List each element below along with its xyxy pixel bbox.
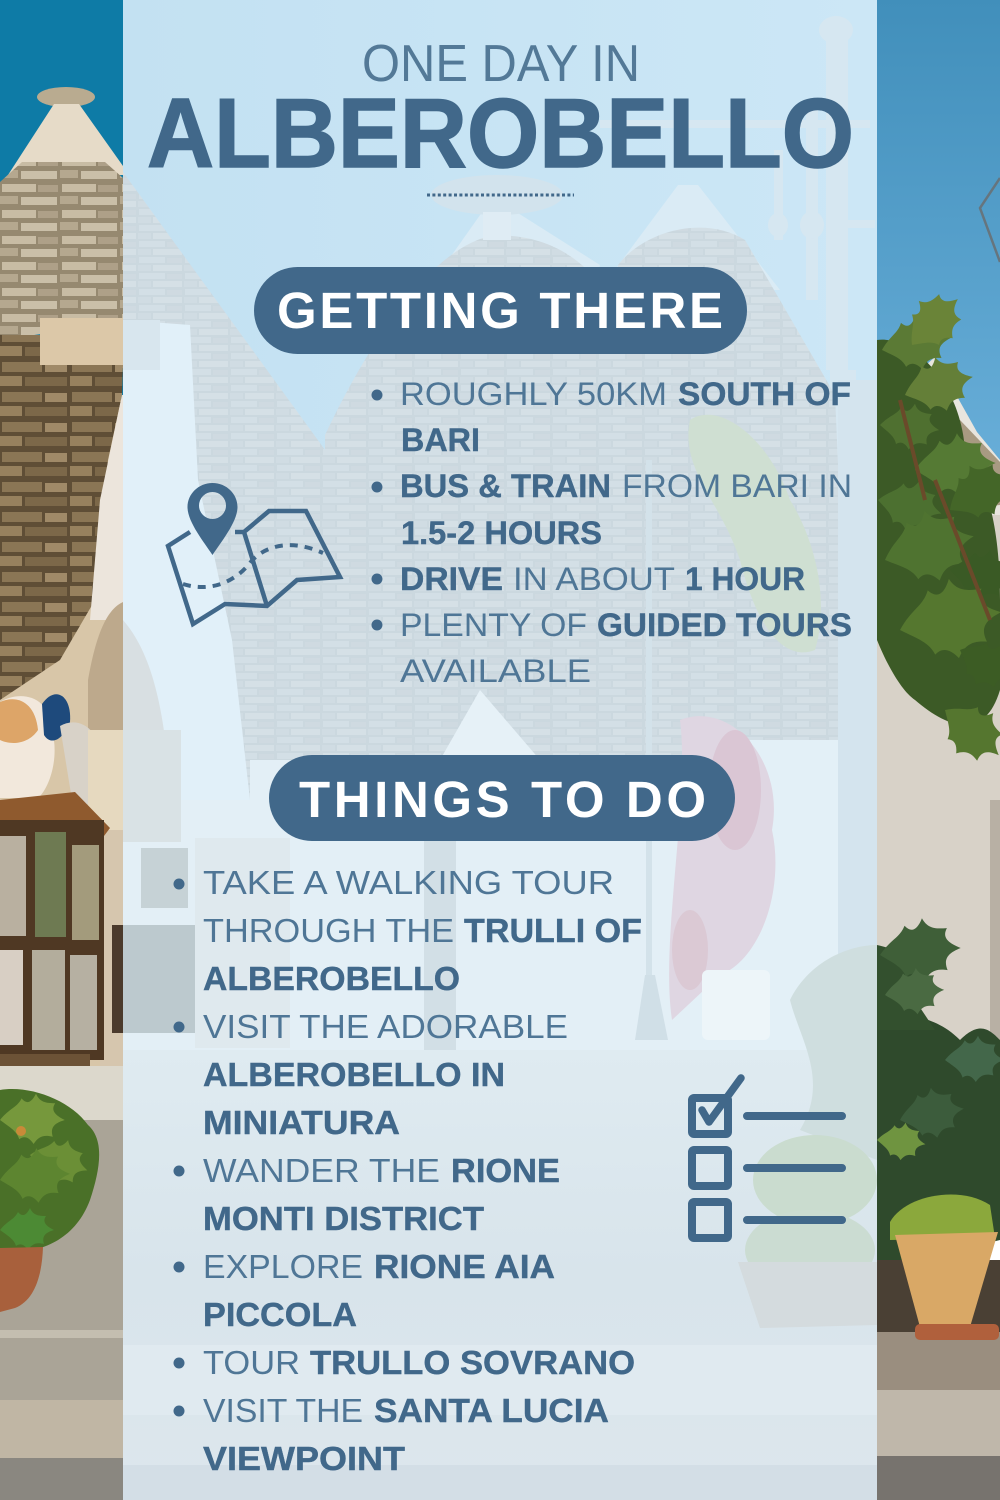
heading: things to do	[269, 755, 735, 841]
ground	[0, 1066, 123, 1500]
washed pink flowers	[669, 716, 775, 1040]
list: getting there: 1 HOUR	[685, 561, 805, 597]
list: things to do: TRULLI OF	[464, 913, 642, 950]
washed right trullo	[618, 185, 838, 740]
list: things to do: TRULLO SOVRANO	[310, 1345, 635, 1382]
list: things to do: TOUR	[203, 1345, 300, 1382]
wire ornament	[980, 178, 1000, 262]
washed lamp post	[600, 16, 875, 454]
list: things to do: VIEWPOINT	[203, 1441, 406, 1478]
lower plants	[875, 915, 1000, 1270]
list: getting there: PLENTY OF	[400, 607, 587, 643]
washed buildings	[123, 380, 877, 1060]
icon: checklist	[692, 1078, 842, 1238]
list: things to do	[174, 865, 642, 1478]
list: getting there: BARI	[401, 422, 480, 458]
terracotta pot	[895, 1232, 999, 1340]
washed shop and boards	[123, 730, 195, 1033]
title: ALBEROBELLO	[147, 78, 854, 188]
title	[147, 35, 854, 188]
list: things to do: EXPLORE	[203, 1249, 363, 1286]
washed ground	[123, 1050, 877, 1500]
list: things to do: ALBEROBELLO	[203, 961, 460, 998]
potted plant	[0, 1089, 99, 1312]
fig tree leaves	[873, 281, 1000, 775]
heading: getting there: GETTING THERE	[277, 282, 723, 339]
list: things to do: THROUGH THE	[203, 913, 454, 950]
list: getting there	[372, 376, 852, 689]
list: getting there: SOUTH OF	[678, 376, 851, 412]
souvenir statue	[0, 694, 90, 804]
list: things to do: TAKE A WALKING TOUR	[203, 865, 614, 902]
washed left trullo	[123, 172, 325, 800]
list: getting there: IN ABOUT	[513, 561, 675, 597]
list: things to do: ALBEROBELLO IN	[203, 1057, 505, 1094]
washed plant	[738, 945, 877, 1328]
washed foliage and arch	[440, 415, 821, 760]
wall and poster	[88, 730, 123, 1033]
list: things to do: RIONE AIA	[374, 1249, 555, 1286]
list: getting there: GUIDED TOURS	[597, 607, 852, 643]
list: getting there: DRIVE	[400, 561, 503, 597]
roof and wall	[877, 357, 1000, 1055]
list: things to do: VISIT THE ADORABLE	[203, 1009, 568, 1046]
list: things to do: PICCOLA	[203, 1297, 357, 1334]
ground	[877, 1260, 1000, 1500]
list: things to do: SANTA LUCIA	[374, 1393, 609, 1430]
title: ONE DAY IN	[362, 35, 640, 93]
list: getting there: 1.5-2 HOURS	[401, 515, 602, 551]
heading: getting there	[254, 267, 747, 354]
washed middle trullo	[325, 175, 690, 760]
photo background: right side	[873, 0, 1000, 1500]
list: things to do: WANDER THE	[203, 1153, 440, 1190]
list: things to do: MINIATURA	[203, 1105, 400, 1142]
photo background: left side	[0, 0, 123, 1500]
trullo stone cone	[0, 87, 123, 800]
list: things to do: MONTI DISTRICT	[203, 1201, 485, 1238]
list: things to do: VISIT THE	[203, 1393, 363, 1430]
dotted divider	[427, 194, 574, 196]
list: getting there: ROUGHLY 50KM	[400, 376, 667, 412]
icon: map with pin	[168, 483, 340, 624]
list: things to do: RIONE	[451, 1153, 560, 1190]
shop window	[0, 792, 110, 1066]
translucent panel with washed photo	[123, 0, 877, 1500]
heading: things to do: THINGS TO DO	[299, 771, 706, 828]
list: getting there: BUS & TRAIN	[400, 468, 611, 504]
list: getting there: AVAILABLE	[400, 653, 591, 689]
list: getting there: FROM BARI IN	[622, 468, 852, 504]
